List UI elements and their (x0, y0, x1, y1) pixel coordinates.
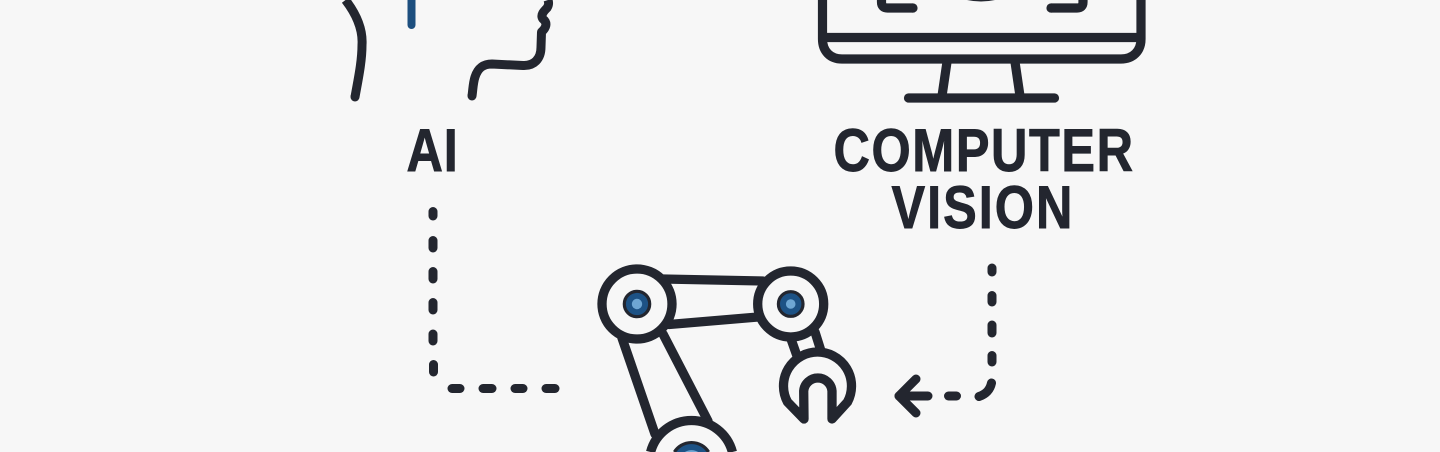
icon: robot arm (602, 269, 851, 452)
icon: computer monitor (822, 0, 1141, 98)
label: computer vision: COMPUTER (834, 117, 1135, 184)
elbow joint (758, 271, 824, 337)
wrist link (791, 332, 821, 356)
label: AI: AI (406, 117, 459, 184)
icon: AI head profile (346, 0, 549, 102)
wrench gripper (783, 352, 851, 419)
arrow: AI to robot, dashed (433, 212, 555, 388)
label: computer vision (834, 117, 1135, 241)
label: computer vision: VISION (892, 174, 1074, 241)
shoulder joint (602, 269, 672, 339)
base joint (651, 420, 732, 452)
arrow: computer vision to robot, dashed (899, 268, 992, 413)
upper arm (663, 279, 763, 324)
lower arm (622, 334, 708, 434)
